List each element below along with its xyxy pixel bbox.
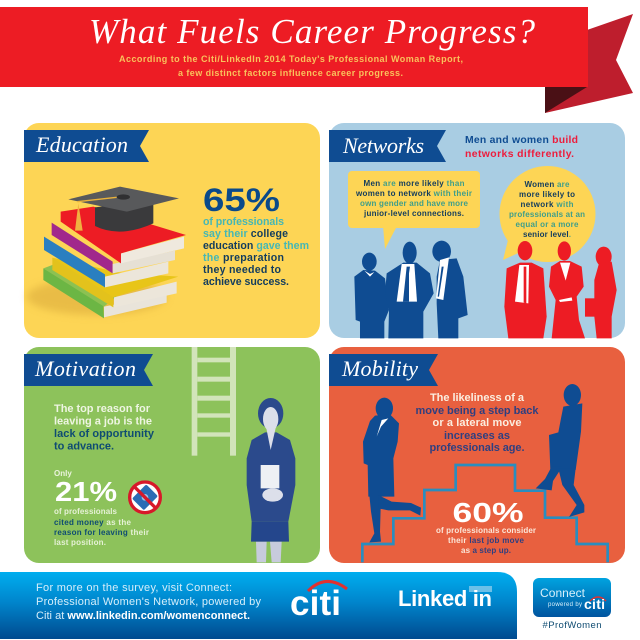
icon: group of men xyxy=(354,241,468,338)
mobility stat text: as a step up. xyxy=(461,546,511,555)
logo: citi: citi xyxy=(290,584,341,623)
education text: they needed to xyxy=(203,264,282,276)
panel: networks xyxy=(329,123,625,338)
education banner xyxy=(24,130,149,162)
money text: of professionals xyxy=(54,507,118,516)
speech bubble: men: Men are more likely than xyxy=(364,179,465,188)
education text: of professionals xyxy=(203,216,284,228)
mobility banner xyxy=(329,354,438,386)
motivation text: lack of opportunity xyxy=(54,428,155,440)
networks heading: networks differently. xyxy=(465,149,574,160)
education text: achieve success. xyxy=(203,276,289,288)
networks heading: Men and women build xyxy=(465,135,578,146)
mobility text: or a lateral move xyxy=(432,417,522,429)
mobility stat text: their last job move xyxy=(448,536,525,545)
speech bubble: men: junior-level connections. xyxy=(363,209,464,218)
education text: say their college xyxy=(203,228,288,240)
footer text: Citi at www.linkedin.com/womenconnect. xyxy=(36,610,250,622)
mobility banner: Mobility xyxy=(341,356,418,381)
connect badge: Connect xyxy=(540,586,586,600)
speech bubble: women: senior level. xyxy=(523,230,571,239)
speech bubble: women: equal or a more xyxy=(516,220,579,229)
icon: no money xyxy=(130,482,160,513)
motivation banner xyxy=(24,354,153,386)
motivation text: leaving a job is the xyxy=(54,416,152,428)
mobility stat text xyxy=(436,526,536,555)
icon: book stack with graduation cap xyxy=(27,187,186,318)
connect badge: citi xyxy=(584,596,605,612)
speech bubble: women: professionals at an xyxy=(509,210,585,219)
connect badge: powered by xyxy=(548,602,582,608)
footer text xyxy=(36,582,262,622)
money text: cited money as the xyxy=(54,518,132,527)
education banner: Education xyxy=(35,132,128,157)
panel: mobility xyxy=(329,347,625,563)
icon: woman silhouette left xyxy=(363,398,421,542)
mobility text: move being a step back xyxy=(416,405,539,417)
panel: education xyxy=(24,123,320,338)
speech bubble: women: more likely to xyxy=(519,190,575,199)
subtitle: a few distinct factors influence career progress. xyxy=(178,68,403,78)
mobility text: professionals age. xyxy=(430,442,524,454)
networks banner: Networks xyxy=(342,133,424,158)
logo: linkedin: Linked in xyxy=(398,586,492,611)
money text xyxy=(54,507,149,547)
connect badge xyxy=(533,578,611,617)
speech bubble: men: own gender and have more xyxy=(360,199,469,208)
speech bubble: men: women to network with their xyxy=(355,189,472,198)
footer band xyxy=(0,572,517,639)
icon: group of women xyxy=(504,241,617,338)
mobility stat text: of professionals consider xyxy=(436,526,536,535)
speech bubble: women: network with xyxy=(520,200,574,209)
speech bubble: women: Women are xyxy=(524,180,570,189)
motivation text xyxy=(54,403,155,452)
icon: businesswoman xyxy=(247,398,295,562)
motivation text: to advance. xyxy=(54,440,114,452)
hashtag: #ProfWomen xyxy=(542,620,602,631)
icon: woman silhouette right xyxy=(536,384,584,517)
subtitle: According to the Citi/LinkedIn 2014 Today's Professional Woman Report, xyxy=(119,54,463,64)
subtitle xyxy=(119,54,463,78)
mobility text: The likeliness of a xyxy=(430,392,525,404)
networks banner xyxy=(329,130,446,162)
stat: 21%: 21% xyxy=(55,476,117,507)
footer text: Professional Women's Network, powered by xyxy=(36,596,262,608)
education text: education gave them xyxy=(203,240,309,252)
icon: ladder xyxy=(192,347,236,456)
stat: 60%: 60% xyxy=(452,497,524,528)
motivation banner: Motivation xyxy=(34,356,136,381)
education text xyxy=(203,216,309,288)
footer text: For more on the survey, visit Connect: xyxy=(36,582,232,594)
education text: the preparation xyxy=(203,252,284,264)
speech bubble: men xyxy=(348,171,480,249)
money text: last position. xyxy=(54,538,106,547)
money text: reason for leaving their xyxy=(54,528,149,537)
motivation text: The top reason for xyxy=(54,403,151,415)
networks heading xyxy=(465,135,578,160)
panel: motivation xyxy=(24,347,320,563)
stat: 21%: Only xyxy=(54,469,72,478)
stat: 65%: 65% xyxy=(203,182,280,218)
title: What Fuels Career Progress? xyxy=(89,12,536,51)
mobility text: increases as xyxy=(444,430,510,442)
speech bubble: women xyxy=(500,166,596,262)
mobility text xyxy=(416,392,539,454)
header ribbon xyxy=(0,7,633,113)
icon: stairs xyxy=(362,465,608,562)
